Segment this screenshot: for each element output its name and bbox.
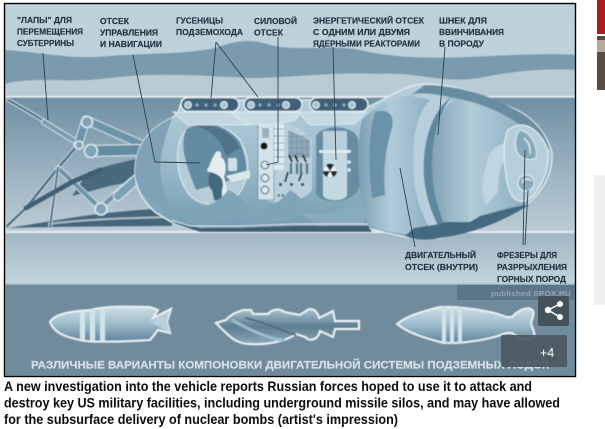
bottom band xyxy=(5,284,575,376)
bottom caption in graphic: РАЗЛИЧНЫЕ ВАРИАНТЫ КОМПОНОВКИ ДВИГАТЕЛЬНОЙ СИСТЕМЫ ПОДЗЕМНЫХ ЛОДОК xyxy=(31,358,549,372)
label: power compartment: СИЛОВОЙ xyxy=(254,15,297,26)
caption: for the subsurface delivery of nuclear bombs (artist's impression) xyxy=(4,412,398,427)
rock strata background xyxy=(5,41,575,97)
label: control compartment: УПРАВЛЕНИЯ xyxy=(100,28,158,38)
label: legs xyxy=(17,15,83,48)
lower dark belly xyxy=(405,204,530,240)
label: cutters xyxy=(497,250,567,284)
rear rounded segments xyxy=(358,94,440,235)
engine variant 3 xyxy=(397,306,534,344)
label: tracks: ГУСЕНИЦЫ xyxy=(176,16,223,26)
watermark: published SPOX.RU xyxy=(491,289,571,298)
label: energy compartment: ЯДЕРНЫМИ РЕАКТОРАМИ xyxy=(313,38,420,48)
label: control compartment: ОТСЕК xyxy=(100,16,130,26)
label: legs: ПЕРЕМЕЩЕНИЯ xyxy=(17,26,83,36)
label: control compartment xyxy=(100,16,162,49)
tracks xyxy=(181,98,368,112)
page background sidebar: adjacent thumbnails xyxy=(594,0,605,305)
upper dark band xyxy=(412,85,550,150)
engine variant 2 xyxy=(216,309,359,344)
plus four badge xyxy=(501,335,567,367)
rear hull shading xyxy=(135,118,172,212)
ground below tunnel xyxy=(5,232,575,284)
engine variant 1 xyxy=(50,307,171,342)
label: engine compartment: ДВИГАТЕЛЬНЫЙ xyxy=(405,249,476,260)
share button xyxy=(538,296,569,326)
label: legs: "ЛАПЫ" ДЛЯ xyxy=(17,15,72,25)
label: engine compartment xyxy=(405,249,478,272)
reactor bay xyxy=(316,127,360,202)
cutter head xyxy=(504,125,548,201)
label: tracks: ПОДЗЕМОХОДА xyxy=(176,27,243,37)
lower skids xyxy=(172,190,252,224)
label: auger: ШНЕК ДЛЯ xyxy=(439,16,487,26)
label: auger: ВВИНЧИВАНИЯ xyxy=(439,27,504,37)
upper skids xyxy=(173,112,252,125)
caption: destroy key US military facilities, including underground missile silos, and may have allowed xyxy=(4,396,560,410)
caption: A new investigation into the vehicle reports Russian forces hoped to use it to attack and xyxy=(4,379,532,394)
tunnel xyxy=(5,97,575,232)
hull xyxy=(135,84,552,240)
label: auger: В ПОРОДУ xyxy=(439,38,485,48)
label: tracks xyxy=(176,16,243,37)
cutters xyxy=(516,130,536,191)
leader lines xyxy=(43,37,528,247)
label: auger xyxy=(439,16,504,48)
legs xyxy=(7,100,145,227)
power compartment xyxy=(258,123,312,203)
bottom tread xyxy=(170,222,372,232)
label: control compartment: И НАВИГАЦИИ xyxy=(100,39,162,49)
watermark xyxy=(457,285,575,300)
radiation symbol xyxy=(323,163,337,177)
rear compartment: cabin window xyxy=(177,125,248,205)
label: power compartment: ОТСЕК xyxy=(254,28,284,38)
label: power compartment xyxy=(254,15,297,38)
label: legs: СУБТЕРРИНЫ xyxy=(17,38,74,48)
label: cutters: РАЗРРЫХЛЕНИЯ xyxy=(497,262,567,272)
label: cutters: ГОРНЫХ ПОРОД xyxy=(497,274,566,284)
figure in cabin xyxy=(207,151,250,202)
artwork xyxy=(5,41,575,376)
leg joints xyxy=(75,116,107,215)
label: engine compartment: ОТСЕК (ВНУТРИ) xyxy=(405,262,478,272)
plus four badge: +4 xyxy=(540,346,554,360)
label: energy compartment: С ОДНИМ ИЛИ ДВУМЯ xyxy=(313,27,410,37)
label: cutters: ФРЕЗЕРЫ ДЛЯ xyxy=(497,250,557,260)
vehicle shadow xyxy=(7,208,172,228)
caption xyxy=(4,379,560,427)
label: energy compartment: ЭНЕРГЕТИЧЕСКИЙ ОТСЕК xyxy=(313,14,425,26)
label: energy compartment xyxy=(313,14,425,48)
